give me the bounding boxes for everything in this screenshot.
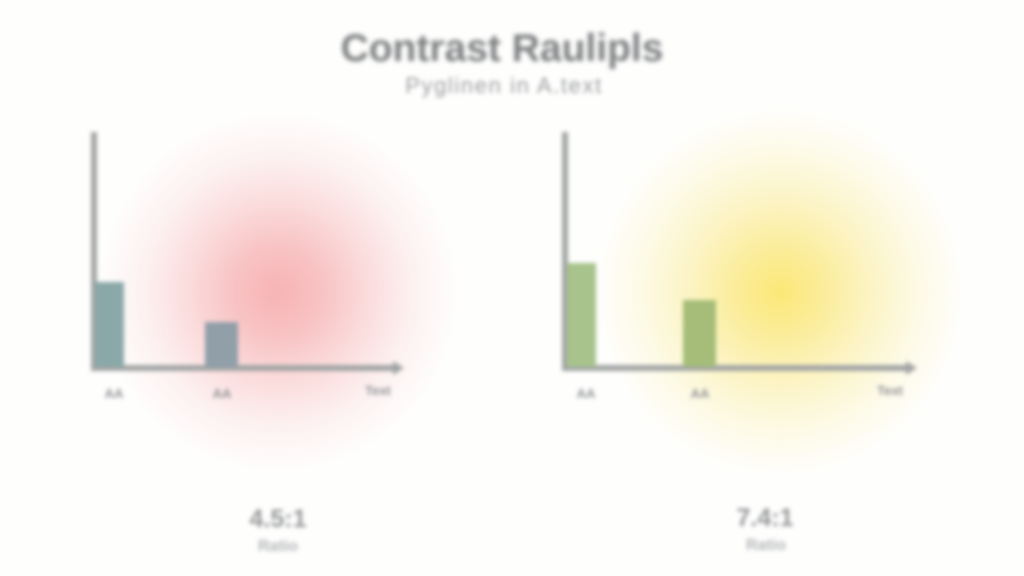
axis labels: right <box>577 383 904 401</box>
axis labels: right: AA <box>577 386 596 401</box>
axis labels: right: Text <box>877 383 904 398</box>
bars and axes: right <box>562 132 917 375</box>
axis labels: left <box>105 383 392 401</box>
bars and axes: left <box>91 132 404 375</box>
ratio: left: 4.5:1 <box>250 505 306 533</box>
axis labels: left: AA <box>213 386 232 401</box>
ratio caption: left: Ratio <box>258 538 298 555</box>
glow: yellow circle <box>594 106 966 478</box>
axis labels: left: Text <box>365 383 392 398</box>
glow: red circle <box>98 112 458 472</box>
axis labels: left: AA <box>105 386 124 401</box>
ratio caption: right: Ratio <box>746 537 786 554</box>
subtitle: Pyglinen in A.text <box>405 73 603 98</box>
axis labels: right: AA <box>691 386 710 401</box>
ratio: right: 7.4:1 <box>737 504 793 532</box>
title: Contrast Raulipls <box>341 27 663 70</box>
